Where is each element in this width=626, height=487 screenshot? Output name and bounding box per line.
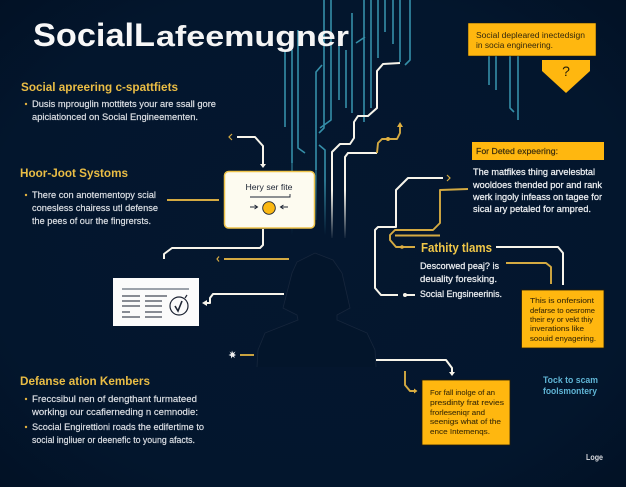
small star marker with dash	[228, 350, 254, 358]
title: SocialL	[33, 17, 155, 53]
bottom callout: frorleseniqr and	[430, 408, 485, 417]
label text block: Descorwed peaj? is	[420, 261, 499, 271]
bullet text: apiciationced on Social Engineementen.	[32, 112, 198, 122]
bullet text: social ingliuer or deenefic to young afacts.	[32, 435, 195, 445]
center box: flow diagram: Hery ser fite	[246, 183, 293, 192]
heading: Hoor-Joot Systoms	[20, 166, 128, 180]
title: afeemugner	[156, 21, 349, 53]
teal note: foolsmontery	[543, 386, 597, 396]
center box: flow diagram	[224, 172, 314, 228]
top right callout	[468, 23, 596, 56]
section: defense members	[20, 374, 204, 445]
arrow: yellow into bottom callout	[405, 371, 418, 394]
label: fathity tlams: Fathity tlams	[421, 241, 492, 255]
right panel: paragraph: The matfikes thing arvelesbtal	[473, 167, 595, 177]
right panel: paragraph	[472, 167, 602, 214]
connectors into right callout	[496, 247, 563, 285]
right panel: paragraph: werk ingoly infeass on tagee for	[472, 192, 602, 202]
right callout	[522, 290, 604, 348]
right callout: inverations like	[530, 324, 584, 333]
teal note	[543, 375, 598, 396]
bottom callout: For fall inolge of an	[430, 388, 495, 397]
label text block: deuality foresking.	[420, 274, 497, 284]
top right callout: in socia engineering.	[476, 41, 553, 50]
right callout: soouid enyagering.	[530, 334, 596, 343]
logo label: Loge	[586, 453, 603, 462]
top right callout: Social depleared inectedsign	[476, 31, 585, 40]
connector: from box to document	[164, 229, 263, 259]
label text block	[420, 261, 502, 299]
bullet text	[25, 394, 204, 445]
bottom callout: ence Intemenqs.	[430, 427, 490, 436]
heading: Social apreering c-spattfiets	[21, 80, 178, 94]
bottom callout: presdinty frat revies	[430, 398, 504, 407]
title	[33, 17, 349, 53]
bullet text: There con anotementopy scial	[32, 190, 156, 200]
section: social engineering tactics	[21, 80, 216, 122]
bottom callout: seenigs what of the	[430, 417, 501, 426]
connector: yellow line into center box	[167, 199, 219, 201]
arrow: white into bottom callout	[376, 360, 455, 376]
arrow: yellow leftward line	[217, 256, 289, 262]
teal note: Tock to scam	[543, 375, 598, 385]
teal circuit lines	[285, 0, 518, 235]
bullet text: Dusis mprouglin mottitets your are ssall gore	[32, 99, 216, 109]
right callout: their ey or vekt thiy	[530, 315, 593, 324]
arrow: into document card	[202, 294, 284, 306]
bullet text	[25, 190, 158, 226]
bullet text	[25, 99, 216, 122]
right callout: defarse to oesrome	[530, 306, 595, 315]
document card with check badge	[113, 278, 199, 326]
bullet text: conesless chairess utl defense	[32, 203, 158, 213]
circuit path: white stepped upper	[332, 63, 400, 238]
bullet text: workingι our ccafierneding n cemnodie:	[31, 407, 198, 417]
bullet text: Scocial Engirettioni roads the edifertime to	[32, 422, 204, 432]
question mark badge: ?	[562, 63, 570, 79]
question mark badge	[542, 60, 590, 93]
bullet text: the pees of our the fingrersts.	[32, 216, 151, 226]
right panel: paragraph: sical ary petaled for ampred.	[473, 204, 591, 214]
label text block: Social Engsineerinis.	[420, 289, 502, 299]
arrow: into center box from above	[229, 134, 266, 168]
right callout: This is onfersiont	[530, 296, 595, 305]
bullet text: Freccsibul nen of dengthant furmateed	[32, 394, 197, 404]
bottom callout	[422, 380, 510, 445]
right panel: heading bar	[472, 142, 604, 160]
right panel: heading bar: For Deted expeering:	[476, 146, 558, 156]
section: honeypot systems	[20, 166, 158, 226]
circuit path: white and yellow with dot	[345, 122, 403, 238]
silhouette of a person	[257, 253, 376, 367]
circuit cluster around labels	[375, 175, 468, 297]
heading: Defanse ation Kembers	[20, 374, 150, 388]
right panel: paragraph: wooldoes thended por and rank	[472, 180, 602, 190]
